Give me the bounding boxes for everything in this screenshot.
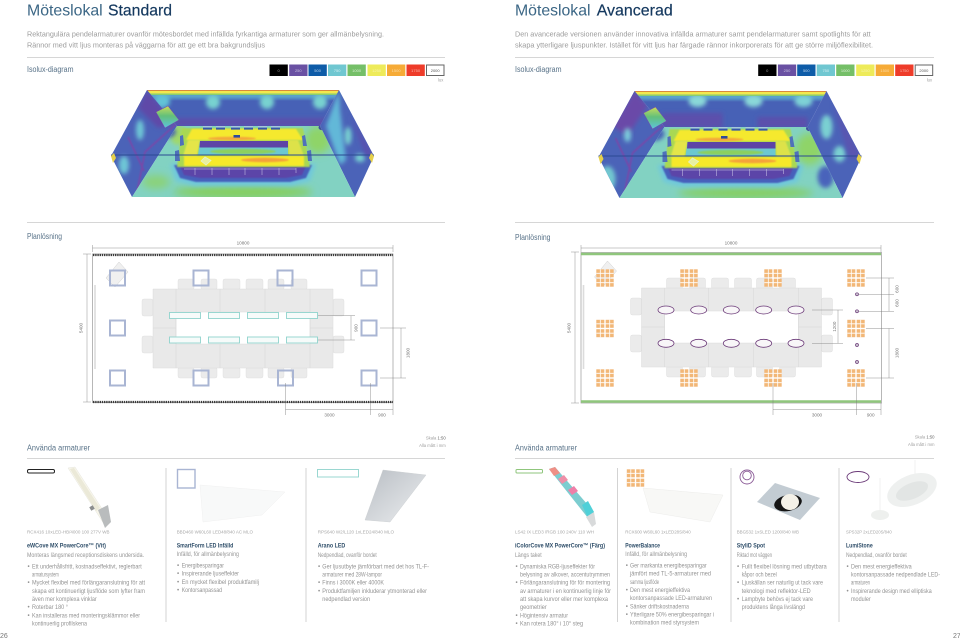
feature list: • [516,613,518,620]
feature list: Ett underhållsfritt, kostnadseffektivt, reglerbart [32,564,142,571]
feature list: Produktfamiljen inkluderar ytmonterad eller [322,588,427,595]
feature list: Inspirerande ljuseffekter [182,571,239,578]
product photo: recessed grid panel [643,488,723,522]
room outline and cove strips [92,254,393,402]
product: Arano LED [318,470,429,603]
dimensions [78,240,410,418]
feature list: Den mest energieffektiva [630,587,690,594]
room outline and coloured cove strips [581,252,882,403]
elliptical pendant luminaires [658,306,804,347]
feature list: kontorsanpassade LED-armaturen [630,595,712,602]
conference table and chairs [142,279,344,378]
legend: lux scale: 0 [277,68,280,73]
legend: lux scale: 500 [803,68,810,73]
feature list: Högintensiv armatur [520,613,568,620]
feature list: • [626,587,628,594]
product: Arano LED: Nedpendlad, ovanför bordet [318,552,377,559]
legend: lux scale: 750 [334,68,341,73]
recessed square luminaires [110,270,376,386]
feature list: • [177,562,179,569]
product: iColorCove MX PowerCore (Färg): Längs taket [515,552,542,559]
floor plan: advanced [566,240,900,418]
icon: green cove symbol [516,470,542,473]
scale note [419,436,446,448]
dimensions: 3000 [812,412,823,418]
title: Avancerad [597,2,673,20]
feature list: • [28,604,30,611]
feature list: armaturer med 28W-lampor [322,572,382,579]
feature list: • [626,603,628,610]
legend: lux scale: lux [927,78,933,82]
feature list: • [177,571,179,578]
dimensions: 600 [894,285,900,293]
product: eWCove MX PowerCore (Vit): RCX416 10xLED-HB/4000 100 277V WB [27,530,110,534]
dimensions: 3000 [324,412,335,418]
icon: square luminaire symbol [178,470,195,488]
feature list [626,562,714,627]
feature list: teknologi med reflektor-LED [742,588,811,595]
legend: lux scale: 0 [766,68,769,73]
legend: lux scale: 750 [822,68,830,73]
product photo: cove luminaire [68,467,111,528]
intro text: Rännor med vitt ljus monteras på väggarna för att ge ett bra bakgrundsljus [27,42,266,50]
product: StyliD Spot: BBG532 1xSLED 1200/840 WB [737,530,799,534]
title [27,2,172,20]
feature list: • [28,564,30,571]
feature list: Energibesparingar [182,562,224,569]
product: eWCove MX PowerCore (Vit): eWCove MX PowerCore™ (Vit) [27,543,106,550]
feature list: • [737,596,739,603]
feature list: Fullt flexibel lösning med utbytbara [742,564,827,571]
product photo: colour cove luminaire [549,467,596,527]
legend: lux scale: 1000 [841,68,851,73]
legend: lux scale: 1250 [372,68,382,73]
product: LumiStone [846,460,942,603]
title: Möteslokal [515,2,590,20]
product: iColorCove MX PowerCore (Färg): iColorCove MX PowerCore™ (Färg) [515,543,605,550]
feature list: Finns i 3000K eller 4000K [322,580,385,587]
product: SmartForm LED Infälld: Infälld, för allmänbelysning [177,551,239,558]
legend: lux scale: lux [438,78,444,82]
feature list: Dynamiska RGB-ljuseffekter för [520,564,595,571]
legend: lux scale: 1750 [411,68,421,73]
dimensions: 900 [378,412,386,418]
intro text [27,31,384,50]
intro text: Den avancerade versionen använder innovativa infällda armaturer samt pendelarmaturer samt spotlights för att [515,31,871,38]
scale note [908,434,935,447]
feature list: Ger markanta energibesparingar [630,562,707,569]
feature list: • [516,621,518,628]
feature list: även mer komplexa vinklar [32,596,97,603]
icon: linear pendant symbol [318,470,358,477]
product: iColorCove MX PowerCore (Färg): LS42 IX LED3 /RGB 100 240V 110 WH [515,530,594,534]
feature list: Kontorsanpassad [182,587,222,594]
product: LumiStone: Nedpendlad, ovanför bordet [846,552,907,559]
legend: lux scale: 2000 [431,68,440,73]
feature list: av armaturer i en kontinuerlig linje för [520,588,611,595]
dimensions: 1800 [894,347,900,358]
product: SmartForm LED Infälld: BBD460 W60L60 LED48/840 AC MLO [177,530,253,534]
feature list: belysning av alkover, accentutrymmen [520,572,610,579]
feature list: Ljuskällan ser naturlig ut tack vare [742,580,823,587]
product: PowerBalance: PowerBalance [625,543,660,550]
feature list: En mycket flexibel produktfamilj [182,579,259,586]
feature list: • [177,579,179,586]
product: PowerBalance: Infälld, för allmänbelysning [625,551,687,558]
legend: lux scale: 1500 [880,68,890,73]
feature list: Lampbyte behövs ej tack vare [742,596,813,603]
product photo: spotlight [757,483,820,520]
feature list: Mycket flexibel med förlängaranslutning för att [32,580,145,587]
product: eWCove MX PowerCore (Vit): Monteras längsmed receptionsdiskens undersida. [27,552,144,559]
title [515,2,673,20]
feature list [516,564,611,628]
heading: Isolux-diagram: Isolux-diagram [27,65,74,74]
heading: Isolux-diagram: Isolux-diagram [515,65,562,74]
feature list: • [516,564,518,571]
linear pendant luminaires [170,312,318,343]
feature list: kontinuerlig profilskena [32,621,87,628]
product photo: pendant [365,470,426,522]
feature list: kontorsanpassade nedpendlade LED- [851,572,940,579]
icon: grid luminaire symbol [627,469,644,487]
title: Standard [108,2,172,20]
feature list: • [737,564,739,571]
icon: spotlight symbol [740,470,754,484]
legend: lux scale: 250 [784,68,791,73]
feature list: • [318,564,320,571]
feature list: armaturen [851,580,870,587]
isolux heatmap: standard room [111,90,374,197]
legend: lux scale: 1750 [900,68,910,73]
product: iColorCove MX PowerCore (Färg) [515,467,611,628]
product: LumiStone: LumiStone [846,543,873,550]
feature list: nedpendlad version [322,596,370,603]
icon: linear cove symbol [28,470,54,473]
legend: lux scale: 1250 [861,68,871,73]
product: Arano LED: Arano LED [318,543,346,550]
feature list: Kan rotera 180° i 10° steg [520,621,583,628]
legend: lux scale: 250 [295,68,302,73]
feature list: • [626,612,628,619]
feature list: • [318,580,320,587]
feature list: Ger ljusutbyte jämförbart med det hos TL-F- [322,564,429,571]
feature list: Roterbar 180 ° [32,604,68,611]
feature list: Förlängaranslutning för för montering [520,580,610,587]
dimensions: 1200 [832,321,837,332]
feature list: skapa ett kontinuerligt ljusflöde som lyfter fram [32,588,145,595]
feature list: Kan installeras med monteringsklämmor eller [32,613,140,620]
product: PowerBalance [625,469,723,627]
feature list [318,564,429,603]
feature list: • [318,588,320,595]
legend: lux scale: 2000 [919,68,929,73]
feature list: • [28,580,30,587]
feature list: Sänker driftskostnaderna [630,603,689,610]
product photo: recessed panel [200,485,285,522]
product: StyliD Spot: Riktad mot väggen [737,552,772,559]
intro text: skapa ytterligare ljuspunkter. Istället för vitt ljus har färgade rännor inkorporerats för att ge större miljöflexibilitet. [515,43,873,50]
intro text [515,31,873,50]
product: SmartForm LED Infälld: SmartForm LED Infälld [177,543,233,550]
feature list [28,564,145,628]
feature list [846,564,940,603]
feature list: kombination med styrsystem [630,620,699,627]
heading: Planlösning: Planlösning [27,232,62,241]
legend: lux scale [758,64,933,82]
feature list: • [846,564,849,571]
feature list: samma ljusflöde [630,579,659,586]
dimensions: 5400 [566,322,572,333]
legend: lux scale [270,64,444,82]
intro text: Rektangulära pendelarmaturer ovanför mötesbordet med infällda fyrkantiga armaturer som ger allmänbelysning. [27,31,384,38]
dimensions: 1800 [406,347,410,358]
product photo: pendant discs [871,460,942,520]
product: SmartForm LED Infälld [177,470,285,594]
feature list: armatursystem [32,572,59,579]
product: eWCove MX PowerCore (Vit) [27,467,145,628]
scale note: Alla mått i mm [908,442,935,447]
legend: lux scale: 500 [314,68,322,73]
scale note: Skala 1:50 [426,436,446,440]
heading: Använda armaturer: Använda armaturer [27,444,90,453]
feature list: Den mest energieffektiva [851,564,912,571]
conference table and chairs [630,278,832,377]
legend: lux scale: 1000 [352,68,362,73]
scale note: Skala 1:50 [915,434,935,440]
dimensions: 10800 [725,240,738,246]
feature list: moduler [851,596,871,603]
title: Möteslokal [27,2,103,20]
feature list [177,562,259,594]
wall spotlights [856,293,858,364]
dimensions: 600 [894,299,900,307]
isolux heatmap: advanced room [598,91,862,198]
dimensions: 10800 [237,240,250,246]
feature list: Ytterligare 50% energibesparingar i [630,612,714,619]
right page: Möteslokal Avancerad [515,2,960,639]
feature list: • [737,580,739,587]
dimensions: 5400 [78,322,84,333]
product: LumiStone: SPS32P 2xLED20S/840 [846,530,892,534]
left page: Möteslokal Standard [0,2,446,639]
feature list: kåpor och bezel [742,572,777,579]
feature list [737,564,827,611]
product: PowerBalance: RCX600 W60L60 1xLED28S/840 [625,530,691,534]
legend: lux scale: 1500 [392,68,401,73]
floor plan: standard [78,240,410,418]
feature list: • [177,587,179,594]
scale note: Alla mått i mm [419,443,446,448]
feature list: jämfört med TL-5-armaturer med [629,571,711,578]
heading: Planlösning: Planlösning [515,233,550,242]
feature list: att skapa kurvor eller mer komplexa [520,596,608,603]
heading: Använda armaturer: Använda armaturer [515,444,577,453]
feature list: produktens långa livslängd [742,604,805,611]
dimensions [566,240,900,418]
icon: elliptical pendant symbol [847,472,869,482]
feature list: • [846,588,849,595]
feature list: Inspirerande design med elliptiska [851,588,932,595]
dimensions: 900 [354,324,358,332]
product: StyliD Spot [737,470,827,611]
dimensions: 900 [867,412,875,418]
recessed grid luminaires [596,269,865,387]
product: Arano LED: RPS640 W2/L120 1xLED24/840 MLO [318,530,394,534]
feature list: • [516,580,518,587]
feature list: geometrier [520,604,547,611]
product: StyliD Spot: StyliD Spot [737,543,765,550]
feature list: • [28,613,30,620]
feature list: • [626,562,628,569]
